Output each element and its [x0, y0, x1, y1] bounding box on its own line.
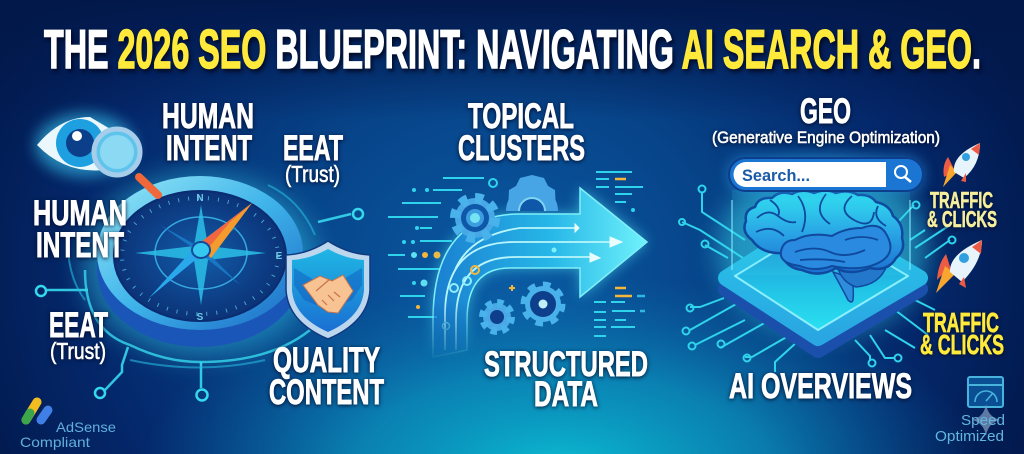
badge: speed optimized [935, 377, 1005, 445]
label: human intent left: HUMAN [33, 194, 127, 233]
label: eeat left: EEAT [49, 306, 108, 345]
label: structured data [484, 345, 648, 414]
badge: speed optimized: Speed [961, 412, 1005, 429]
icon: gears [455, 175, 561, 331]
label: geo [712, 92, 940, 147]
label: ai overviews: AI OVERVIEWS [729, 367, 912, 406]
label: eeat top [283, 129, 343, 187]
label: eeat top: (Trust) [285, 161, 340, 187]
label: geo: (Generative Engine Optimization) [712, 128, 940, 147]
icon: eye with magnifier [35, 113, 158, 195]
compass circuit lines [36, 173, 363, 400]
label: quality content: CONTENT [269, 373, 384, 412]
label: human intent top: INTENT [166, 129, 252, 168]
label: traffic and clicks bottom [920, 307, 1004, 360]
icon: compass [97, 176, 303, 347]
label: topical clusters: CLUSTERS [458, 129, 585, 168]
label: human intent top [162, 97, 254, 168]
search bar [728, 157, 924, 192]
icon: rocket top [943, 143, 980, 187]
arrow: curved arrow [433, 188, 647, 357]
label: quality content: QUALITY [273, 341, 380, 380]
label: topical clusters: TOPICAL [468, 97, 574, 136]
label: structured data: STRUCTURED [484, 345, 648, 384]
circuit lines [679, 186, 956, 372]
badge: speed optimized: Optimized [935, 428, 1004, 445]
label: topical clusters [458, 97, 585, 168]
label: traffic and clicks top [927, 187, 997, 232]
data lines right [594, 172, 645, 336]
label: quality content [269, 341, 384, 412]
panel: topical clusters and structured data [388, 97, 648, 414]
badge: adsense compliant: Compliant [20, 434, 90, 450]
label: structured data: DATA [534, 375, 598, 414]
icon: compass: S [197, 312, 204, 323]
label: human intent top: HUMAN [162, 97, 254, 136]
icon: compass: N [196, 193, 204, 204]
icon: compass: E [276, 251, 283, 262]
icon: brain [744, 190, 903, 302]
icon: ai platform [718, 165, 928, 350]
badge: adsense compliant: AdSense [56, 419, 116, 435]
icon: shield with handshake [286, 241, 370, 339]
label: eeat left: (Trust) [50, 338, 106, 364]
badge: adsense compliant [20, 402, 116, 450]
search bar: Search... [742, 166, 810, 185]
label: eeat left [49, 306, 108, 364]
label: eeat top: EEAT [283, 129, 343, 168]
label: human intent left: INTENT [36, 226, 124, 265]
panel: human intent compass [33, 97, 384, 412]
label: geo: GEO [800, 92, 851, 131]
label: human intent left [33, 194, 127, 265]
panel: geo and ai overviews [679, 92, 1004, 406]
data streams left [388, 178, 497, 317]
icon: rocket bottom [936, 240, 982, 293]
